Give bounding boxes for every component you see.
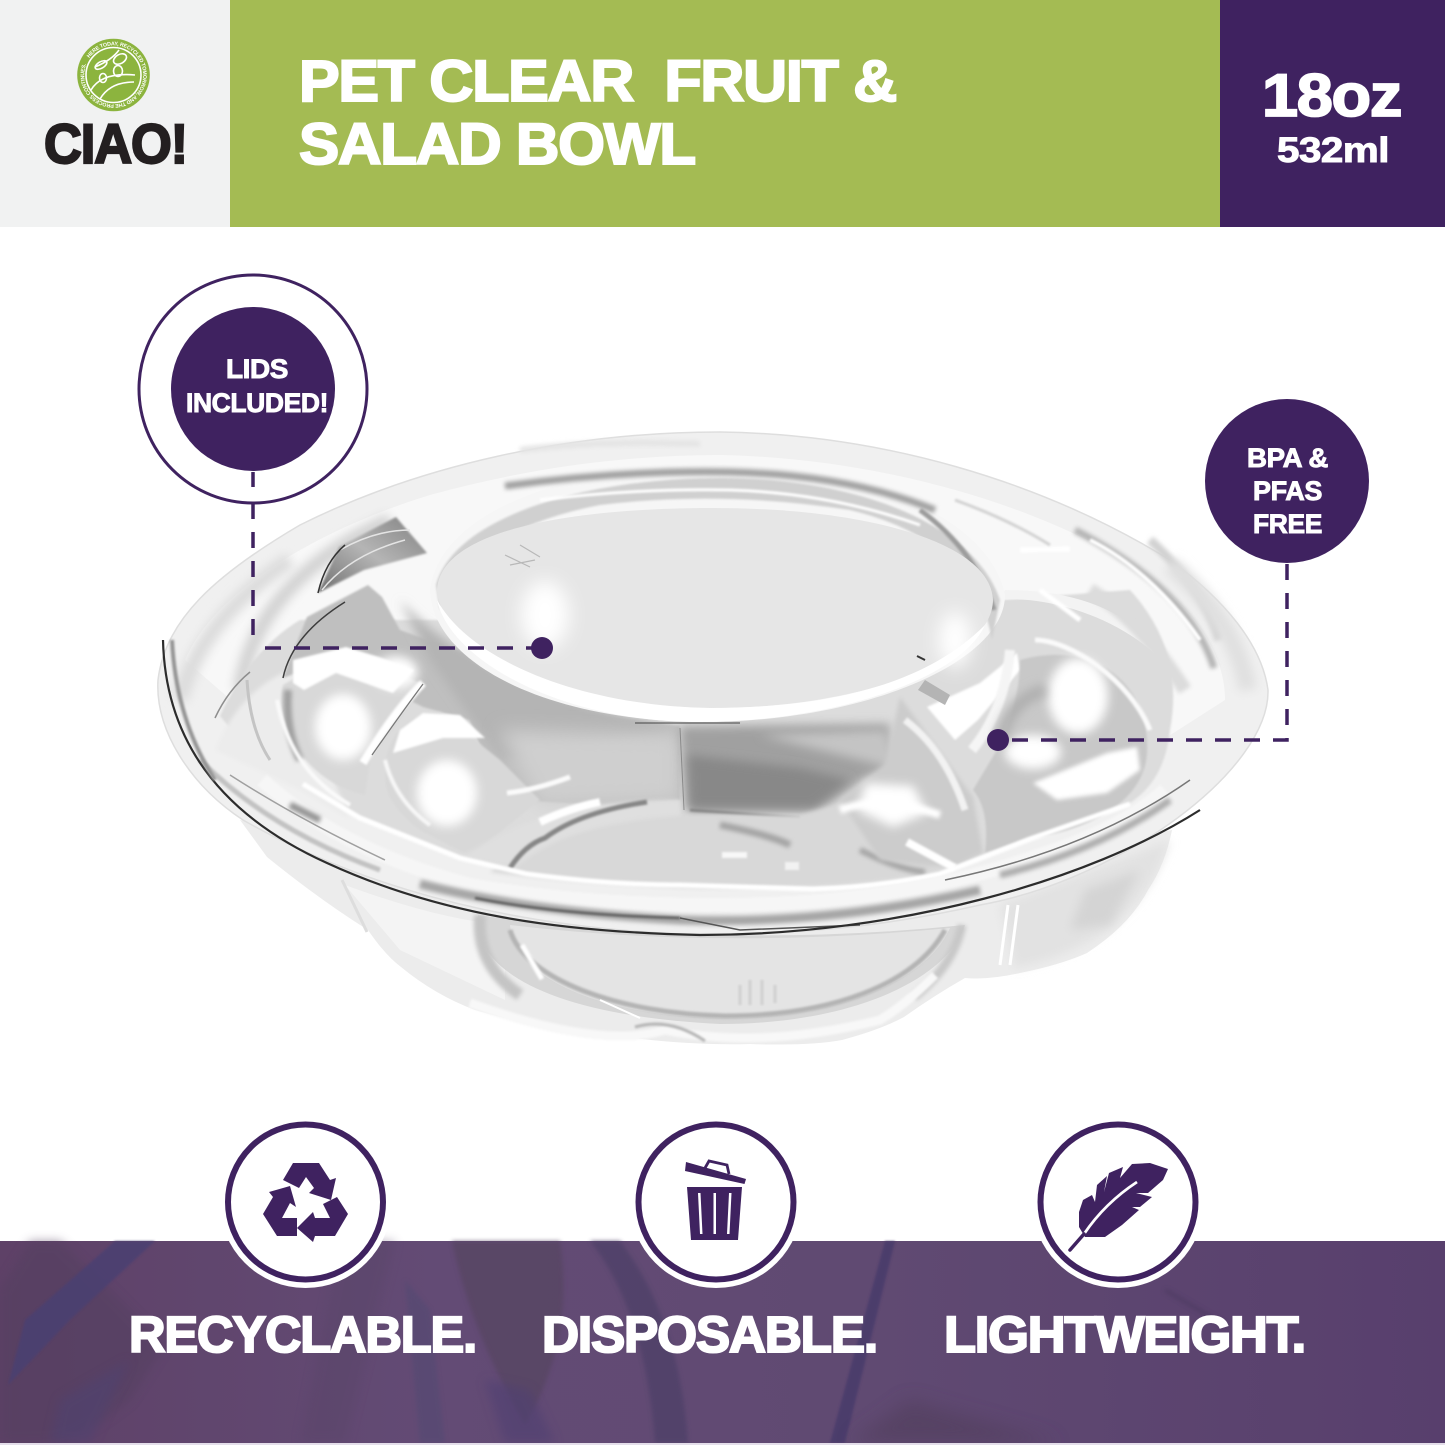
callout text: BPA & — [1247, 443, 1328, 473]
callout text: LIDS — [226, 354, 288, 384]
feature: disposable — [542, 1116, 877, 1363]
callout text — [1247, 443, 1328, 539]
leaf pattern — [0, 1241, 1225, 1443]
right dome — [973, 655, 1147, 853]
title — [299, 49, 896, 177]
icon: feather — [1070, 1163, 1168, 1250]
icon: olive badge: HERE TODAY, RECYCLED TOMORROW, AND THE PROCESS CONTINUES. — [80, 42, 147, 108]
label: DISPOSABLE. — [542, 1306, 877, 1363]
fold between domes — [363, 683, 423, 763]
logo wordmark: CIAO! — [44, 112, 187, 175]
dark fin — [318, 517, 427, 593]
band background — [0, 1241, 1445, 1443]
title: PET CLEAR FRUIT & — [299, 49, 896, 114]
icon ring — [630, 1116, 802, 1288]
icon ring — [220, 1116, 392, 1288]
capacity text: 532ml — [1277, 131, 1389, 170]
base ring — [478, 915, 965, 1024]
callout disc — [1205, 399, 1369, 563]
feature: lightweight — [944, 1116, 1305, 1363]
icon: recycle — [263, 1163, 348, 1242]
leader line — [998, 564, 1287, 740]
callout text: PFAS — [1253, 476, 1322, 506]
callout disc — [171, 307, 335, 471]
bowl interior — [215, 500, 1214, 888]
header — [0, 0, 1445, 227]
callout text — [186, 354, 328, 418]
bottom band — [0, 1241, 1445, 1445]
rim and lid base — [158, 432, 1268, 934]
second dome — [385, 712, 540, 856]
callout: lids included — [139, 275, 553, 659]
strip below band — [0, 1443, 1445, 1445]
callout: bpa and pfas free — [987, 399, 1369, 751]
panel: title — [230, 0, 1220, 227]
left dome — [282, 650, 425, 795]
lower bowl body — [240, 820, 1172, 1044]
leader line — [253, 472, 542, 648]
centre dark reflection — [680, 724, 890, 812]
panel: logo — [0, 0, 230, 227]
label: RECYCLABLE. — [129, 1306, 476, 1363]
product: clear bowl with lid — [158, 432, 1268, 1044]
leader dot — [987, 729, 1009, 751]
leader dot — [531, 637, 553, 659]
grey lobe under fin — [283, 585, 680, 805]
right lid folds — [1000, 590, 1170, 670]
callout text: INCLUDED! — [186, 388, 328, 418]
right glass and highlight — [840, 697, 983, 868]
callout text: FREE — [1253, 509, 1322, 539]
icon ring — [1032, 1116, 1204, 1288]
capacity text: 18oz — [1262, 62, 1401, 129]
panel: capacity — [1220, 0, 1445, 227]
label: LIGHTWEIGHT. — [944, 1306, 1305, 1363]
callout ring — [139, 275, 367, 503]
capacity text — [1262, 62, 1401, 170]
rim dark edge — [163, 640, 1200, 935]
title: SALAD BOWL — [299, 112, 695, 177]
lid shoulder — [185, 455, 1225, 780]
icon: trash bin — [685, 1161, 746, 1240]
feature: recyclable — [129, 1116, 476, 1363]
rim front band — [163, 640, 1200, 935]
base floor — [490, 805, 940, 888]
lid centre disc — [430, 465, 1005, 723]
